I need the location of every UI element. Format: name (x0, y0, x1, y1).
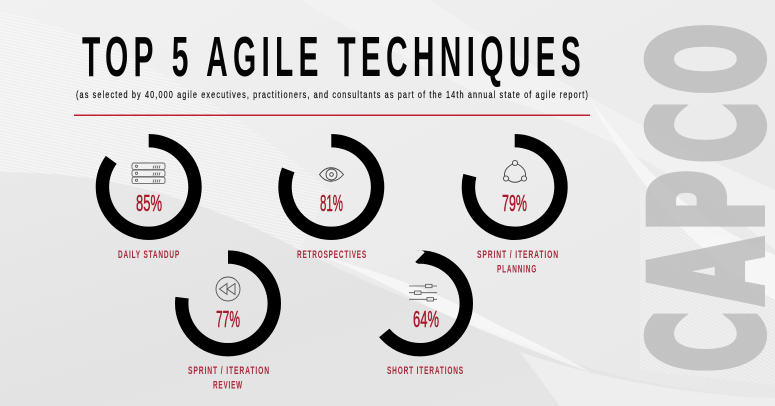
technique: short iterations (374, 257, 466, 377)
label: SPRINT / ITERATION (188, 365, 270, 377)
icon: rewind (216, 277, 240, 301)
icon: sliders (409, 284, 437, 301)
icon: cycle (503, 160, 527, 182)
red divider (74, 114, 590, 116)
donut 64% (374, 257, 466, 350)
donut 81% (285, 141, 378, 233)
icon: server stack (132, 163, 165, 184)
technique: daily standup (102, 141, 195, 261)
label: DAILY STANDUP (118, 249, 180, 261)
technique: retrospectives (285, 141, 378, 261)
value: 77% (216, 306, 240, 332)
donut 77% (182, 257, 274, 350)
label (188, 365, 270, 392)
label: PLANNING (497, 264, 537, 276)
value: 64% (413, 306, 439, 332)
technique: retrospectives: 81% (320, 190, 343, 216)
donut 85% (102, 141, 195, 233)
donut 79% (468, 141, 561, 233)
value: 79% (502, 190, 527, 216)
label (477, 249, 559, 276)
label: RETROSPECTIVES (297, 249, 367, 261)
icon: eye (320, 168, 344, 181)
technique: sprint / iteration review (182, 257, 274, 392)
label: REVIEW (213, 380, 243, 392)
label: SPRINT / ITERATION (477, 249, 559, 261)
value: 85% (136, 190, 162, 216)
label: SHORT ITERATIONS (387, 365, 464, 377)
technique: sprint / iteration planning (468, 141, 561, 276)
